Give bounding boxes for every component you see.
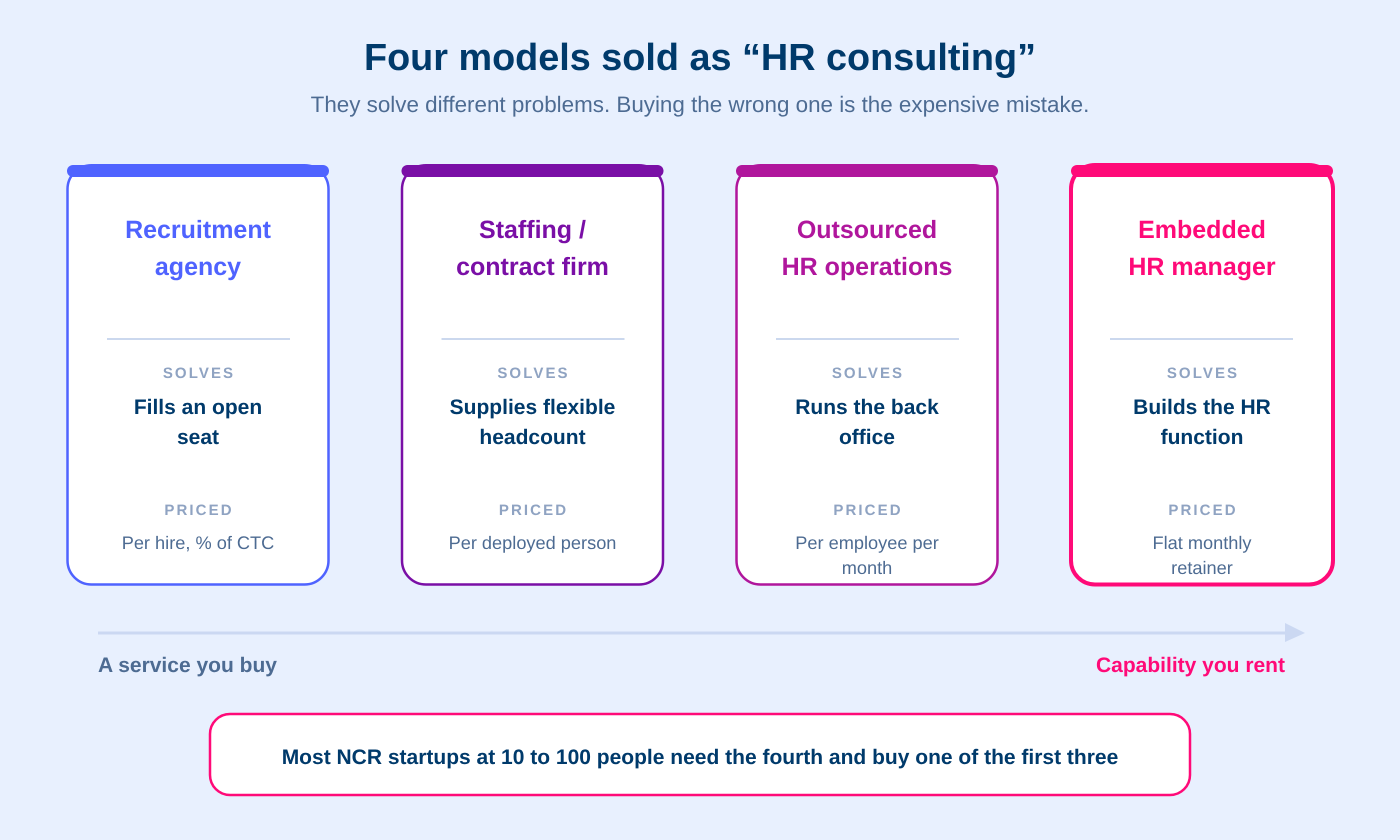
- solves: recruitment agency: SOLVES: [163, 365, 235, 382]
- heading: staffing / contract firm: Staffing /: [479, 216, 586, 244]
- solves text: embedded HR manager: Builds the HR: [1133, 396, 1271, 419]
- arrow: service to capability: [98, 623, 1305, 642]
- solves text: embedded HR manager: function: [1161, 426, 1243, 449]
- panel: outsourced HR operations: [736, 165, 998, 584]
- solves: embedded HR manager: SOLVES: [1167, 365, 1239, 382]
- price text: recruitment agency: Per hire, % of CTC: [122, 533, 274, 553]
- subtitle: They solve different problems. Buying the wrong one is the expensive mistake.: [311, 92, 1089, 117]
- price text: outsourced HR operations: month: [842, 558, 892, 578]
- panel: embedded HR manager: [1071, 165, 1333, 584]
- price text: staffing / contract firm: Per deployed person: [449, 533, 616, 553]
- priced: outsourced HR operations: PRICED: [833, 502, 903, 519]
- axis label: capability you rent: Capability you rent: [1096, 654, 1285, 677]
- heading: staffing / contract firm: contract firm: [456, 253, 609, 281]
- axis label: a service you buy: A service you buy: [98, 654, 277, 677]
- solves: staffing / contract firm: SOLVES: [497, 365, 570, 382]
- solves text: recruitment agency: seat: [177, 426, 219, 449]
- heading: embedded HR manager: HR manager: [1128, 253, 1276, 281]
- solves text: recruitment agency: Fills an open: [134, 396, 262, 419]
- heading: recruitment agency: Recruitment: [125, 216, 272, 244]
- heading: recruitment agency: agency: [155, 253, 241, 281]
- priced: staffing / contract firm: PRICED: [499, 502, 568, 519]
- heading: embedded HR manager: Embedded: [1138, 216, 1266, 244]
- priced: embedded HR manager: PRICED: [1168, 502, 1238, 519]
- solves text: outsourced HR operations: office: [839, 426, 895, 449]
- price text: outsourced HR operations: Per employee per: [795, 533, 939, 553]
- price text: embedded HR manager: retainer: [1171, 558, 1233, 578]
- callout: Most NCR startups at 10 to 100 people need the fourth and buy one of the first three: [282, 746, 1118, 769]
- solves text: staffing / contract firm: Supplies flexible: [450, 396, 615, 419]
- title: Four models sold as “HR consulting”: [364, 37, 1036, 79]
- solves text: outsourced HR operations: Runs the back: [795, 396, 939, 419]
- price text: embedded HR manager: Flat monthly: [1152, 533, 1252, 553]
- solves: outsourced HR operations: SOLVES: [832, 365, 904, 382]
- heading: outsourced HR operations: HR operations: [782, 253, 952, 281]
- panel: staffing / contract firm: [402, 165, 664, 584]
- heading: outsourced HR operations: Outsourced: [797, 216, 937, 244]
- solves text: staffing / contract firm: headcount: [479, 426, 586, 449]
- priced: recruitment agency: PRICED: [164, 502, 234, 519]
- panel: recruitment agency: [67, 165, 329, 584]
- callout: [210, 714, 1190, 795]
